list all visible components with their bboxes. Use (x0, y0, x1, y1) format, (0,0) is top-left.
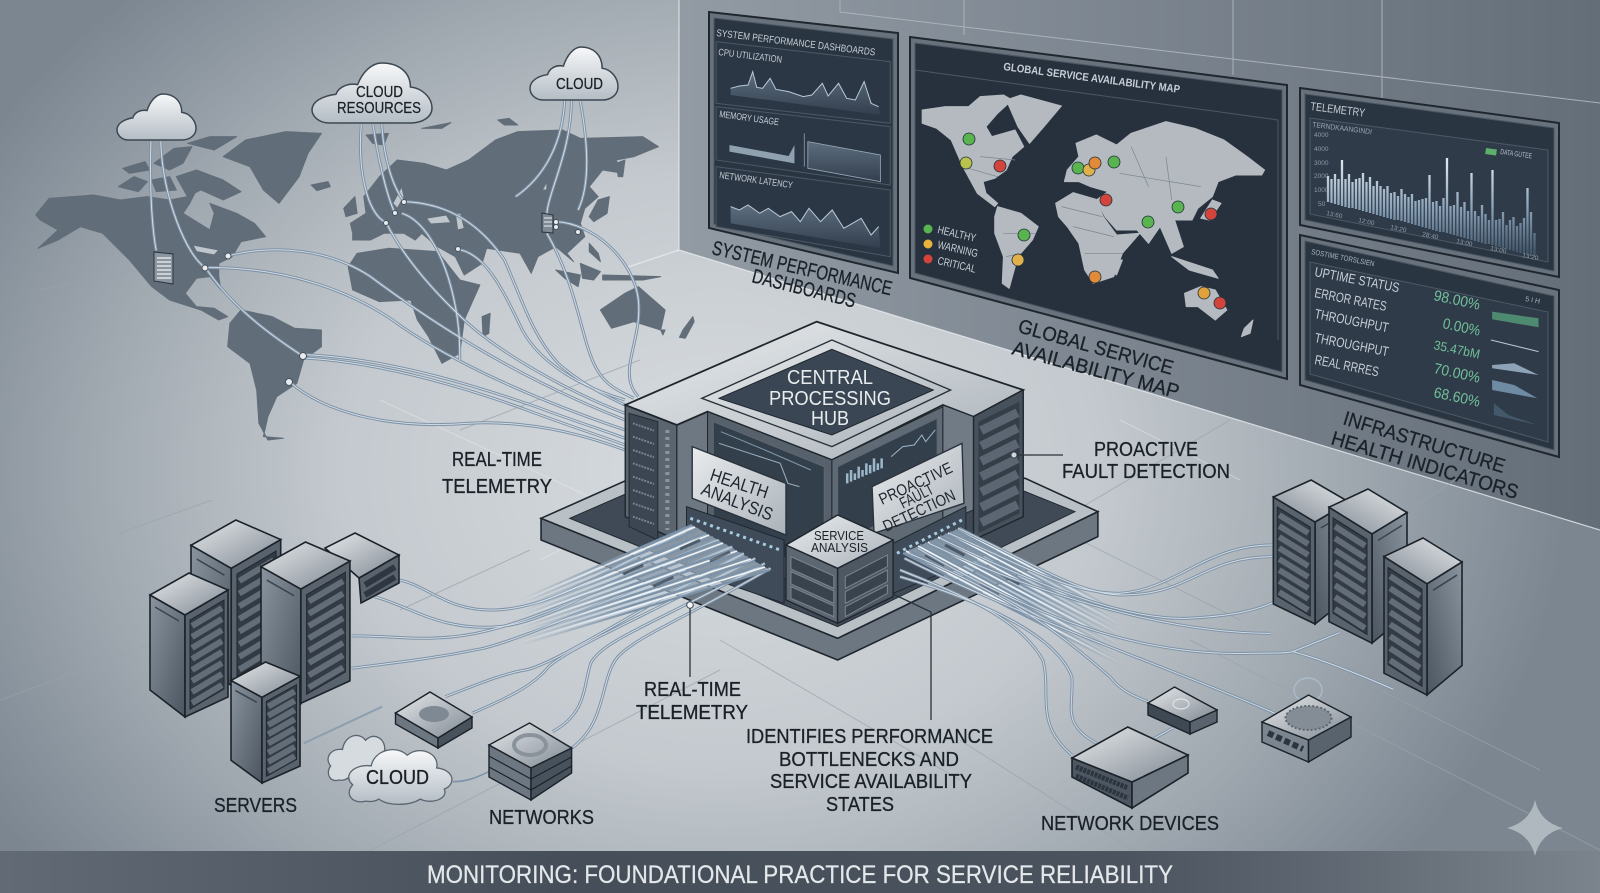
panel title: SYSTEM PERFORMANCE DASHBOARDS (716, 28, 876, 59)
health analysis plate (692, 447, 786, 535)
network latency chart (716, 167, 890, 257)
y axis labels: 4000 (1314, 132, 1329, 139)
metric values: 98.00% (1432, 287, 1482, 314)
chart subtitle: TERNDKAANGINDI (1312, 120, 1372, 136)
small server box (325, 533, 399, 603)
hub base tray (541, 478, 1098, 660)
label: real-time telemetry lower: TELEMETRY (636, 702, 748, 724)
panel: system performance dashboards (709, 12, 898, 273)
sparklines (1491, 312, 1539, 425)
corner label: 5 I H (1525, 296, 1540, 306)
cloud: cloud (530, 47, 618, 100)
y axis labels: 3000 (1314, 160, 1329, 167)
cloud: cloud: CLOUD (556, 76, 603, 93)
label: infrastructure health indicators: HEALTH INDICATORS (1329, 428, 1521, 504)
icon: map server america (154, 252, 173, 284)
label: proactive fault detection (1062, 439, 1230, 483)
map legend: WARNING (936, 239, 979, 260)
cables: right side to racks and devices (900, 528, 1393, 755)
cable bundle: right from hub (903, 528, 1120, 665)
cloud: cloud resources: RESOURCES (337, 100, 421, 117)
panel title: TELEMETRY (1310, 101, 1366, 120)
icon: sparkle watermark (1507, 800, 1563, 856)
service analysis box: ANALYSIS (811, 540, 868, 555)
map cables to central hub (150, 100, 639, 450)
metric labels: UPTIME STATUS (1313, 264, 1401, 295)
hub title: PROCESSING (769, 388, 891, 410)
floor grid lines (0, 272, 1600, 893)
x axis labels: 12:00 (1358, 217, 1375, 227)
label: real-time telemetry upper: TELEMETRY (442, 476, 552, 498)
cloud: cloud resources (312, 63, 432, 123)
leader line: proactive fault detection (1011, 452, 1063, 458)
metric values (1432, 287, 1482, 411)
map legend (924, 224, 979, 276)
health analysis text (699, 465, 776, 525)
x axis labels: 13:00 (1490, 245, 1507, 255)
cloud: lower with label (328, 735, 452, 804)
hub top slab (625, 322, 1023, 460)
y axis labels (1314, 132, 1329, 208)
telemetry bar chart (1328, 158, 1534, 257)
panel: infrastructure health (1300, 235, 1559, 457)
cloud: unlabeled left (117, 94, 196, 140)
metric labels: THROUGHPUT (1313, 306, 1390, 335)
hub title: CENTRAL (787, 367, 873, 389)
map nodes (202, 200, 580, 386)
x axis labels: 13:00 (1456, 238, 1473, 248)
dark world map (922, 95, 1265, 337)
hub title (769, 367, 891, 430)
map legend: HEALTHY (936, 224, 978, 245)
metric labels: REAL RRRES (1313, 352, 1380, 379)
network box C (1148, 687, 1217, 734)
metric labels: ERROR RATES (1313, 285, 1388, 314)
label: system performance dashboards: DASHBOARDS (750, 266, 858, 312)
network stack B (489, 723, 572, 800)
panel subtitle: SOSTIME TORSLSIEN (1311, 247, 1375, 268)
lower right connection panel (893, 507, 966, 593)
data legend (1485, 147, 1533, 160)
label: real-time telemetry lower: REAL-TIME (644, 679, 741, 701)
background: right wall behind the dashboards (625, 0, 1600, 530)
leader line: real-time telemetry (687, 602, 693, 677)
network box A (396, 692, 472, 748)
server rack group left (150, 520, 399, 783)
label: global service availability map: AVAILABILITY MAP (1010, 338, 1182, 403)
proactive plate text: PROACTIVE (877, 460, 955, 509)
map legend: CRITICAL (936, 255, 977, 276)
hub center faces (708, 407, 943, 600)
metric values: 70.00% (1432, 360, 1482, 387)
service analysis box (786, 515, 893, 623)
label: proactive fault detection: FAULT DETECTION (1062, 461, 1230, 483)
panel: telemetry (1300, 88, 1559, 277)
proactive plate text: DETECTION (881, 487, 958, 536)
hub right column (943, 390, 1023, 540)
metric values: 68.60% (1432, 384, 1482, 411)
label: global service availability map: GLOBAL SERVICE (1016, 316, 1176, 380)
leader line: identifies performance (893, 594, 931, 720)
x axis labels: 28:40 (1422, 231, 1439, 241)
cloud: cloud resources: CLOUD (356, 84, 403, 101)
hub left column (625, 405, 708, 540)
memory chart (716, 107, 890, 185)
label: identifies performance bottlenecks: SERVICE AVAILABILITY (770, 771, 972, 793)
y axis labels: 1000 (1314, 187, 1329, 194)
panel: system performance dashboards: NETWORK LATENCY (719, 170, 794, 191)
hub top display plate (702, 340, 951, 447)
label: servers: SERVERS (214, 795, 297, 817)
central processing hub (541, 322, 1098, 660)
label: networks: NETWORKS (489, 807, 594, 829)
panel: system performance dashboards: MEMORY USAGE (719, 109, 780, 128)
cables: left side to servers and networks (304, 527, 771, 782)
x axis labels: 13:20 (1390, 224, 1407, 234)
status pins (960, 133, 1226, 309)
cpu chart (716, 42, 890, 123)
x axis labels: 13:60 (1326, 210, 1343, 220)
y axis labels: 4000 (1314, 146, 1329, 153)
label: infrastructure health indicators: INFRASTRUCTURE (1341, 408, 1508, 478)
label: identifies performance bottlenecks: STATES (826, 794, 894, 816)
world map on left wall and floor (36, 118, 694, 440)
panel title: GLOBAL SERVICE AVAILABILITY MAP (1003, 61, 1181, 96)
metric values: 0.00% (1441, 315, 1482, 340)
proactive plate text (877, 460, 958, 536)
bottom title bar (0, 851, 1600, 893)
panel: system performance dashboards: CPU UTILIZATION (718, 47, 783, 66)
network box D with wireless arc (1262, 678, 1351, 762)
proactive fault detection plate (872, 443, 964, 533)
data legend: DATA GUTEE (1500, 147, 1533, 160)
cable bundle: left from hub (520, 525, 770, 645)
metric labels (1313, 264, 1401, 379)
label: proactive fault detection: PROACTIVE (1094, 439, 1198, 461)
server rack group right (1273, 480, 1462, 695)
metric values: 35.47bM (1432, 337, 1481, 362)
health analysis text: HEALTH (708, 465, 771, 502)
label: real-time telemetry lower (636, 679, 748, 724)
hub title: HUB (811, 408, 849, 430)
proactive plate text: FAULT (897, 481, 937, 513)
lower left connection panel (686, 507, 784, 603)
y axis labels: 2000 (1314, 173, 1329, 180)
panel: global service availability map (910, 37, 1287, 379)
label: identifies performance bottlenecks: IDENTIFIES PERFORMANCE (746, 726, 993, 748)
label: real-time telemetry upper (442, 449, 552, 498)
x axis labels: 13:20 (1522, 252, 1539, 262)
service analysis box: SERVICE (814, 528, 864, 543)
network box E (1072, 727, 1188, 808)
icon: map server asia (542, 213, 553, 233)
metric labels: THROUGHPUT (1313, 330, 1390, 359)
label: system performance dashboards: SYSTEM PERFORMANCE (710, 237, 894, 300)
label: identifies performance bottlenecks: BOTTLENECKS AND (779, 749, 959, 771)
label: network devices: NETWORK DEVICES (1041, 813, 1219, 835)
x axis labels (1326, 210, 1539, 262)
y axis labels: 50 (1318, 201, 1326, 208)
cloud: lower with label: CLOUD (366, 767, 429, 789)
label: real-time telemetry upper: REAL-TIME (452, 449, 542, 471)
health analysis text: ANALYSIS (699, 479, 776, 525)
bottom title bar: MONITORING: FOUNDATIONAL PRACTICE FOR SERVICE RELIABILITY (427, 861, 1173, 889)
label: identifies performance bottlenecks (746, 726, 993, 816)
